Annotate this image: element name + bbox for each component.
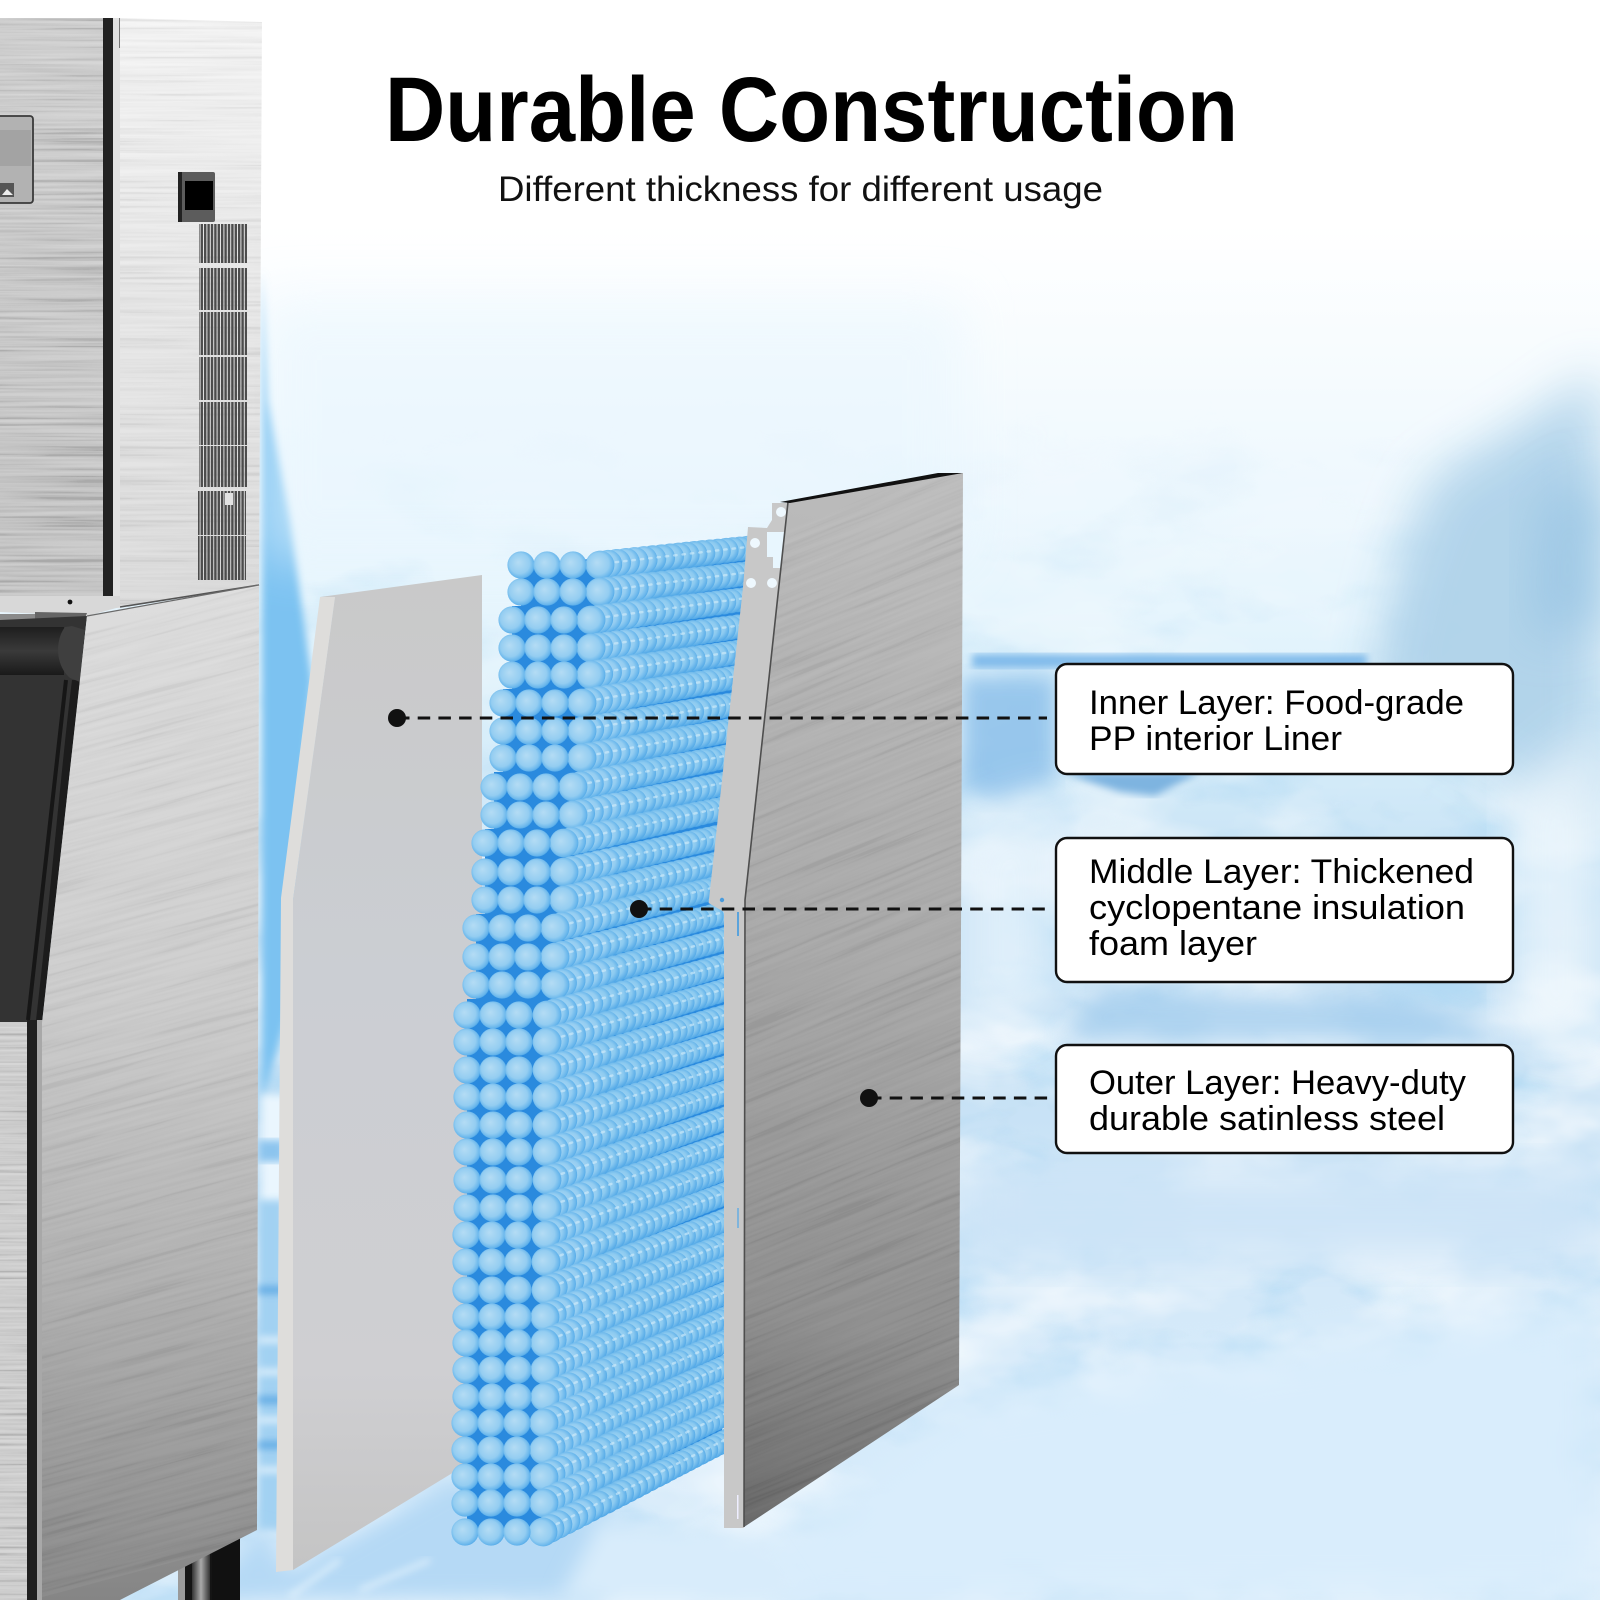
outer layer: stainless steel panel bbox=[708, 473, 963, 1528]
steel face bbox=[743, 473, 963, 1527]
callout: inner layer bbox=[1056, 664, 1513, 774]
inner layer: PP liner panel bbox=[276, 575, 482, 1572]
callout: middle layer bbox=[1056, 838, 1513, 982]
black bin door bbox=[0, 616, 87, 1023]
callout: middle layer: cyclopentane insulation bbox=[1089, 889, 1465, 927]
callout line: outer layer bbox=[860, 1089, 1050, 1107]
subtitle: Different thickness for different usage bbox=[498, 170, 1103, 209]
middle layer: blue foam block of beads bbox=[451, 536, 748, 1546]
callout: inner layer: PP interior Liner bbox=[1089, 720, 1342, 758]
flange notch and holes bbox=[720, 507, 786, 1519]
callout: outer layer: durable satinless steel bbox=[1089, 1100, 1445, 1138]
upper unit side panel bbox=[120, 18, 262, 608]
upper unit front panel bbox=[0, 18, 121, 608]
control panel bbox=[0, 116, 33, 203]
callout: outer layer: Outer Layer: Heavy-duty bbox=[1089, 1064, 1466, 1102]
callout line: inner layer bbox=[388, 709, 1047, 727]
steel flange edge bbox=[709, 503, 788, 1528]
ledge between units bbox=[0, 596, 120, 626]
callout: inner layer: Inner Layer: Food-grade bbox=[1089, 684, 1464, 722]
ice machine cutaway (left) bbox=[0, 18, 262, 1600]
vent grille bbox=[198, 224, 247, 580]
side display bbox=[178, 172, 215, 222]
lower steel door bbox=[42, 584, 260, 1600]
callout: middle layer: Middle Layer: Thickened bbox=[1089, 853, 1474, 891]
lower brushed panel bbox=[0, 1020, 43, 1600]
title: Durable Construction bbox=[385, 59, 1238, 161]
machine legs bbox=[178, 1488, 240, 1600]
black top edge bbox=[780, 473, 963, 503]
callout line: middle layer bbox=[630, 900, 1052, 918]
callout: middle layer: foam layer bbox=[1089, 925, 1257, 963]
callout: outer layer bbox=[1056, 1045, 1513, 1153]
